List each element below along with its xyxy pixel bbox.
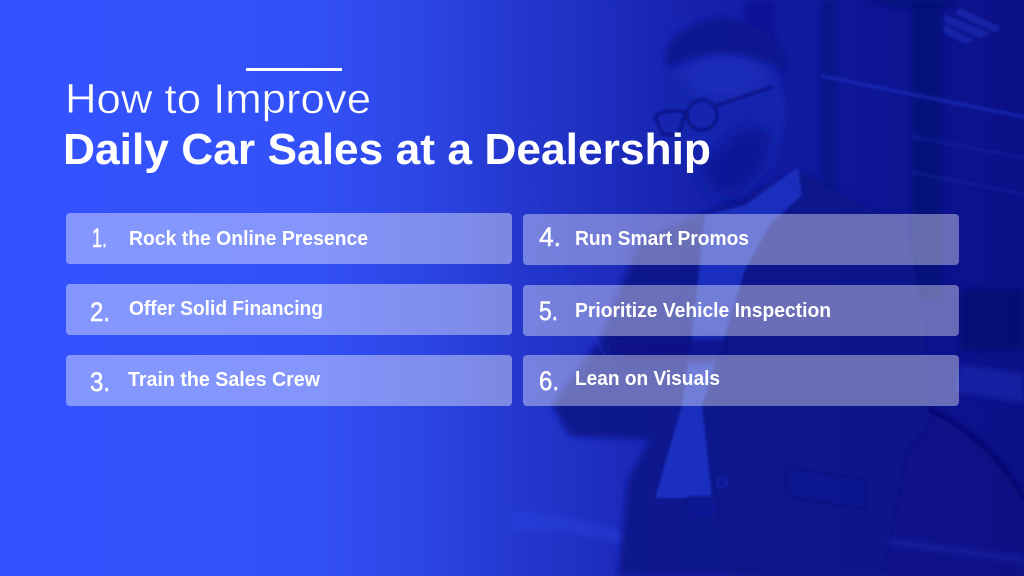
list item 2: 2.	[90, 297, 110, 327]
building pillars	[745, 0, 1024, 350]
list item 3	[66, 355, 512, 406]
laptop edge	[595, 338, 606, 356]
list item 4: 4.	[539, 222, 561, 252]
car	[512, 364, 1024, 576]
list item 4: Run Smart Promos	[575, 228, 749, 250]
background photo: man with laptop	[512, 0, 1024, 576]
list item 2: Offer Solid Financing	[129, 298, 323, 320]
title rule	[246, 68, 342, 71]
title bold line: Daily Car Sales at a Dealership	[63, 125, 711, 174]
list item 2	[66, 284, 512, 335]
beard	[700, 125, 772, 198]
list item 6	[523, 355, 959, 406]
list item 3: Train the Sales Crew	[128, 369, 320, 391]
list item 1: 1.	[92, 223, 107, 253]
list item 1	[66, 213, 512, 264]
jacket pocket and button	[686, 476, 728, 500]
ceiling light	[943, 8, 1001, 44]
title light line: How to Improve	[65, 75, 371, 122]
title	[63, 75, 711, 174]
list item 5: 5.	[539, 296, 558, 326]
forehead highlight	[688, 54, 761, 95]
hair	[665, 18, 787, 72]
list item 6: 6.	[539, 366, 559, 396]
list item 6: Lean on Visuals	[575, 368, 720, 390]
list item 5: Prioritize Vehicle Inspection	[575, 300, 831, 322]
neck and face	[741, 66, 786, 166]
glasses	[655, 87, 772, 135]
list item 4	[523, 214, 959, 265]
hands band	[687, 336, 724, 365]
light streaks	[822, 74, 1024, 194]
list item 5	[523, 285, 959, 336]
list item 1: Rock the Online Presence	[129, 228, 368, 250]
list item 3: 3.	[90, 367, 110, 397]
jacket	[552, 170, 930, 576]
shirt	[655, 167, 802, 498]
